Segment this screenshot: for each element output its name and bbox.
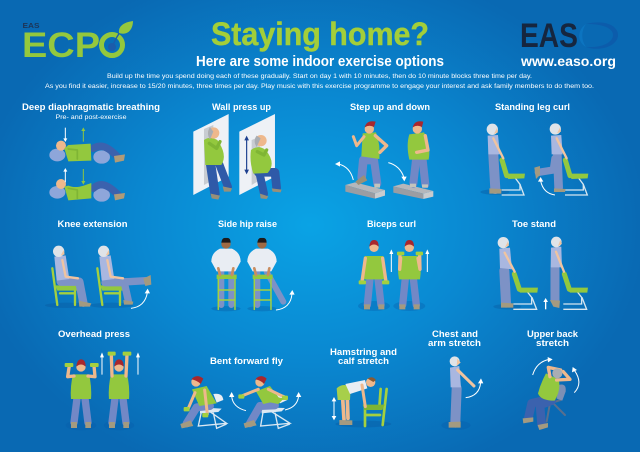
exercise: upper back stretch: [523, 329, 579, 430]
heading: Overhead press: [58, 329, 130, 339]
exercise: overhead press: [58, 329, 140, 430]
logo: EASO: EAS: [520, 17, 578, 55]
figures: side hip raise: [211, 238, 295, 311]
figures: hamstring stretch: [332, 377, 391, 427]
logo: EAS ECPO: [22, 21, 133, 65]
figures: leg curl: [480, 123, 588, 195]
heading: Chest and: [432, 329, 478, 339]
exercise: knee extension: [45, 219, 151, 308]
exercise: side hip raise: [211, 219, 295, 311]
exercise: chest and arm stretch: [428, 329, 483, 430]
exercise: standing leg curl: [480, 102, 588, 195]
exercise: bent forward fly: [180, 356, 301, 428]
logo: EASO: [520, 17, 618, 69]
figures: wall press: [193, 114, 282, 200]
title: Staying home?: [211, 16, 429, 52]
heading: [330, 347, 397, 366]
exercise: deep diaphragmatic breathing: [22, 102, 160, 202]
figures: lying breathing: [49, 127, 125, 202]
figures: knee extension: [45, 246, 151, 308]
heading: arm stretch: [428, 338, 481, 348]
exercise: biceps curl: [358, 219, 429, 311]
exercise: toe stand: [493, 219, 588, 309]
heading: Deep diaphragmatic breathing: [22, 102, 160, 112]
figures: upper back stretch: [523, 357, 579, 430]
sub heading: Pre- and post-exercise: [56, 114, 127, 121]
intro text: As you find it easier, increase to 15/20 minutes, three times per day. Play music with this exercise programme to engage your interest and ask family members to do them too.: [45, 83, 594, 90]
heading: Side hip raise: [218, 219, 277, 229]
figures: chest stretch: [441, 356, 483, 430]
heading: Upper back: [527, 329, 579, 339]
heading: calf stretch: [338, 356, 389, 366]
intro text: [45, 73, 594, 90]
subtitle: Here are some indoor exercise options: [196, 54, 444, 70]
heading: Toe stand: [512, 219, 556, 229]
figures: overhead press: [65, 352, 140, 430]
heading: [527, 329, 579, 348]
logo: EAS ECPO: EAS: [22, 23, 40, 30]
figures: biceps curl: [358, 240, 429, 311]
heading: Standing leg curl: [495, 102, 570, 112]
figures: toe stand: [493, 237, 588, 309]
heading: stretch: [536, 338, 569, 348]
exercise: wall press up: [193, 102, 282, 200]
intro text: Build up the time you spend doing each of these gradually. Start on day 1 with 10 minutes, then do 10 minute blocks three time per day.: [107, 73, 532, 80]
heading: Step up and down: [350, 102, 430, 112]
exercise: step up and down: [335, 102, 433, 199]
figures: step: [335, 121, 433, 199]
figures: bent forward fly: [180, 376, 301, 428]
heading: Bent forward fly: [210, 356, 283, 366]
heading: Hamstring and: [330, 347, 397, 357]
exercise: hamstring and calf stretch: [330, 347, 397, 427]
heading: Biceps curl: [367, 219, 416, 229]
logo: EAS ECPO: ECP: [22, 26, 100, 65]
heading: Knee extension: [58, 219, 128, 229]
logo: EASO: www.easo.org: [520, 54, 616, 69]
heading: [428, 329, 481, 348]
heading: Wall press up: [212, 102, 272, 112]
